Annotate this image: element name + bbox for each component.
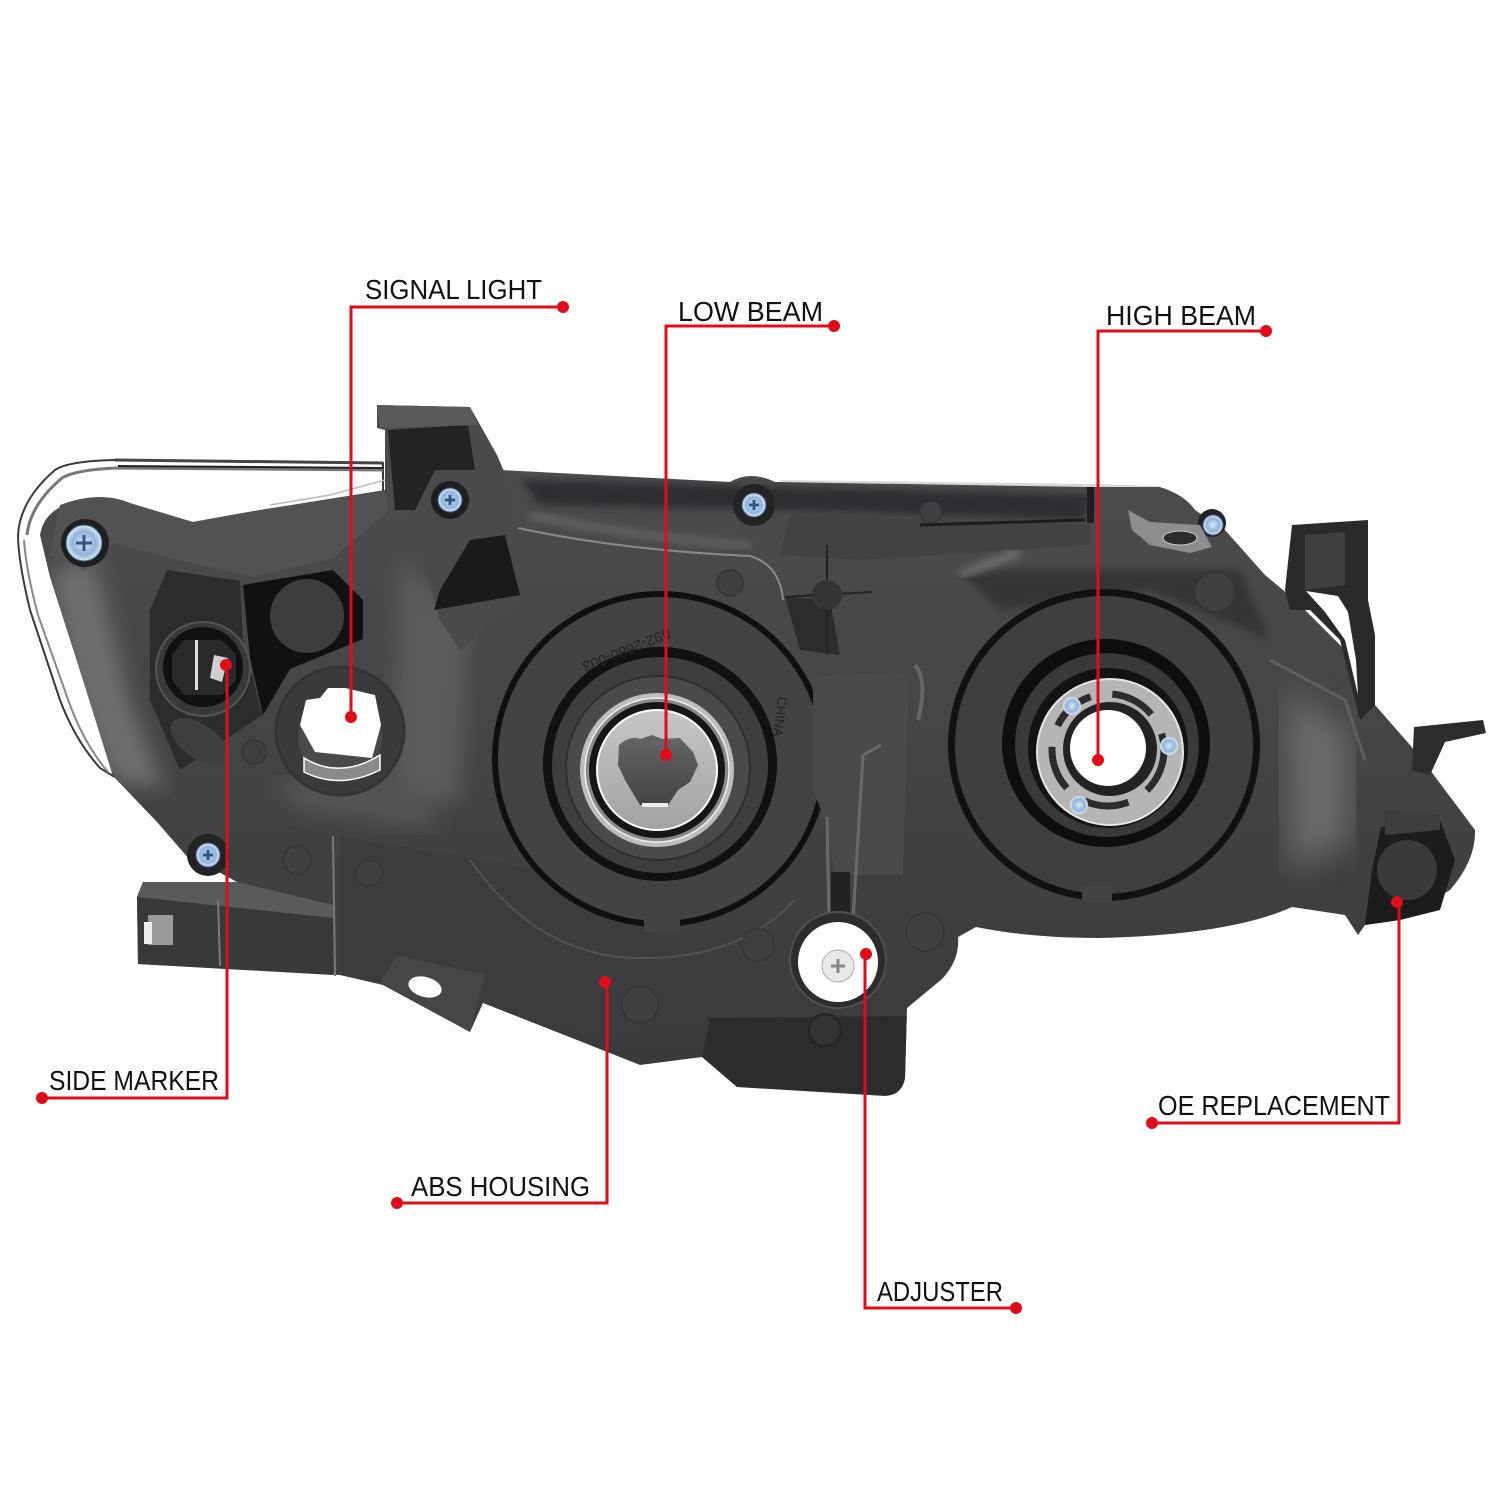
callout: high beam: HIGH BEAM: [1106, 300, 1256, 331]
adjuster screw: [790, 912, 886, 1008]
low beam assembly: CHINA: [770, 696, 790, 738]
blue screws: [66, 488, 1223, 867]
moulded dimples: [242, 502, 1234, 962]
callout: abs housing: ABS HOUSING: [411, 1171, 590, 1202]
signal socket: [276, 667, 404, 795]
marker pod: [162, 709, 238, 775]
low beam bulb opening: [618, 735, 698, 805]
beam ring gaps: [644, 886, 1112, 932]
lamp cap: [270, 579, 344, 653]
lamp cap cavity: [243, 570, 363, 715]
lower dark panel: [702, 1016, 907, 1096]
headlight assembly: [18, 405, 1486, 1096]
callout: side marker: [36, 659, 232, 1104]
signal light leader: [351, 307, 563, 717]
bracket left bottom: [137, 836, 335, 976]
low beam leader: [666, 326, 834, 755]
connector plug: [1365, 810, 1455, 925]
screw posts: [61, 481, 1226, 876]
side marker leader: [42, 665, 227, 1098]
callout: signal light: SIGNAL LIGHT: [365, 274, 542, 305]
top arm: [50, 491, 387, 577]
callout: low beam: [660, 296, 840, 761]
right tab: [1412, 720, 1486, 775]
abs housing leader: [397, 982, 607, 1203]
callout: signal light: [345, 274, 569, 723]
ear mount: [380, 955, 485, 1032]
adjuster leader: [865, 954, 1016, 1308]
oe replacement leader: [1152, 902, 1399, 1123]
lower ring arc: [470, 860, 795, 958]
callout: oe replacement: OE REPLACEMENT: [1158, 1090, 1390, 1121]
clear lens: [18, 460, 385, 776]
high beam leader: [1098, 331, 1266, 760]
callout: high beam: [1092, 300, 1272, 766]
callout: abs housing: [391, 976, 611, 1209]
callout: side marker: SIDE MARKER: [49, 1065, 219, 1096]
housing shading: [50, 480, 1365, 1096]
upper left cavity: [150, 570, 262, 770]
callout: low beam: LOW BEAM: [678, 296, 823, 327]
adjuster panel: [813, 665, 922, 922]
main housing: [40, 470, 1475, 1096]
high beam assembly: [948, 589, 1260, 901]
top bracket: [377, 405, 520, 650]
callout: adjuster: ADJUSTER: [877, 1276, 1003, 1307]
callout: adjuster: [860, 948, 1022, 1314]
side marker socket: [156, 622, 250, 716]
lens sliver along top edge: [780, 480, 1160, 490]
low beam assembly: 892-2680-003: [580, 624, 673, 675]
mounting tab: [1087, 487, 1212, 553]
callout: oe replacement: [1146, 896, 1403, 1129]
low beam assembly: [492, 591, 828, 927]
right bracket: [1285, 520, 1375, 720]
